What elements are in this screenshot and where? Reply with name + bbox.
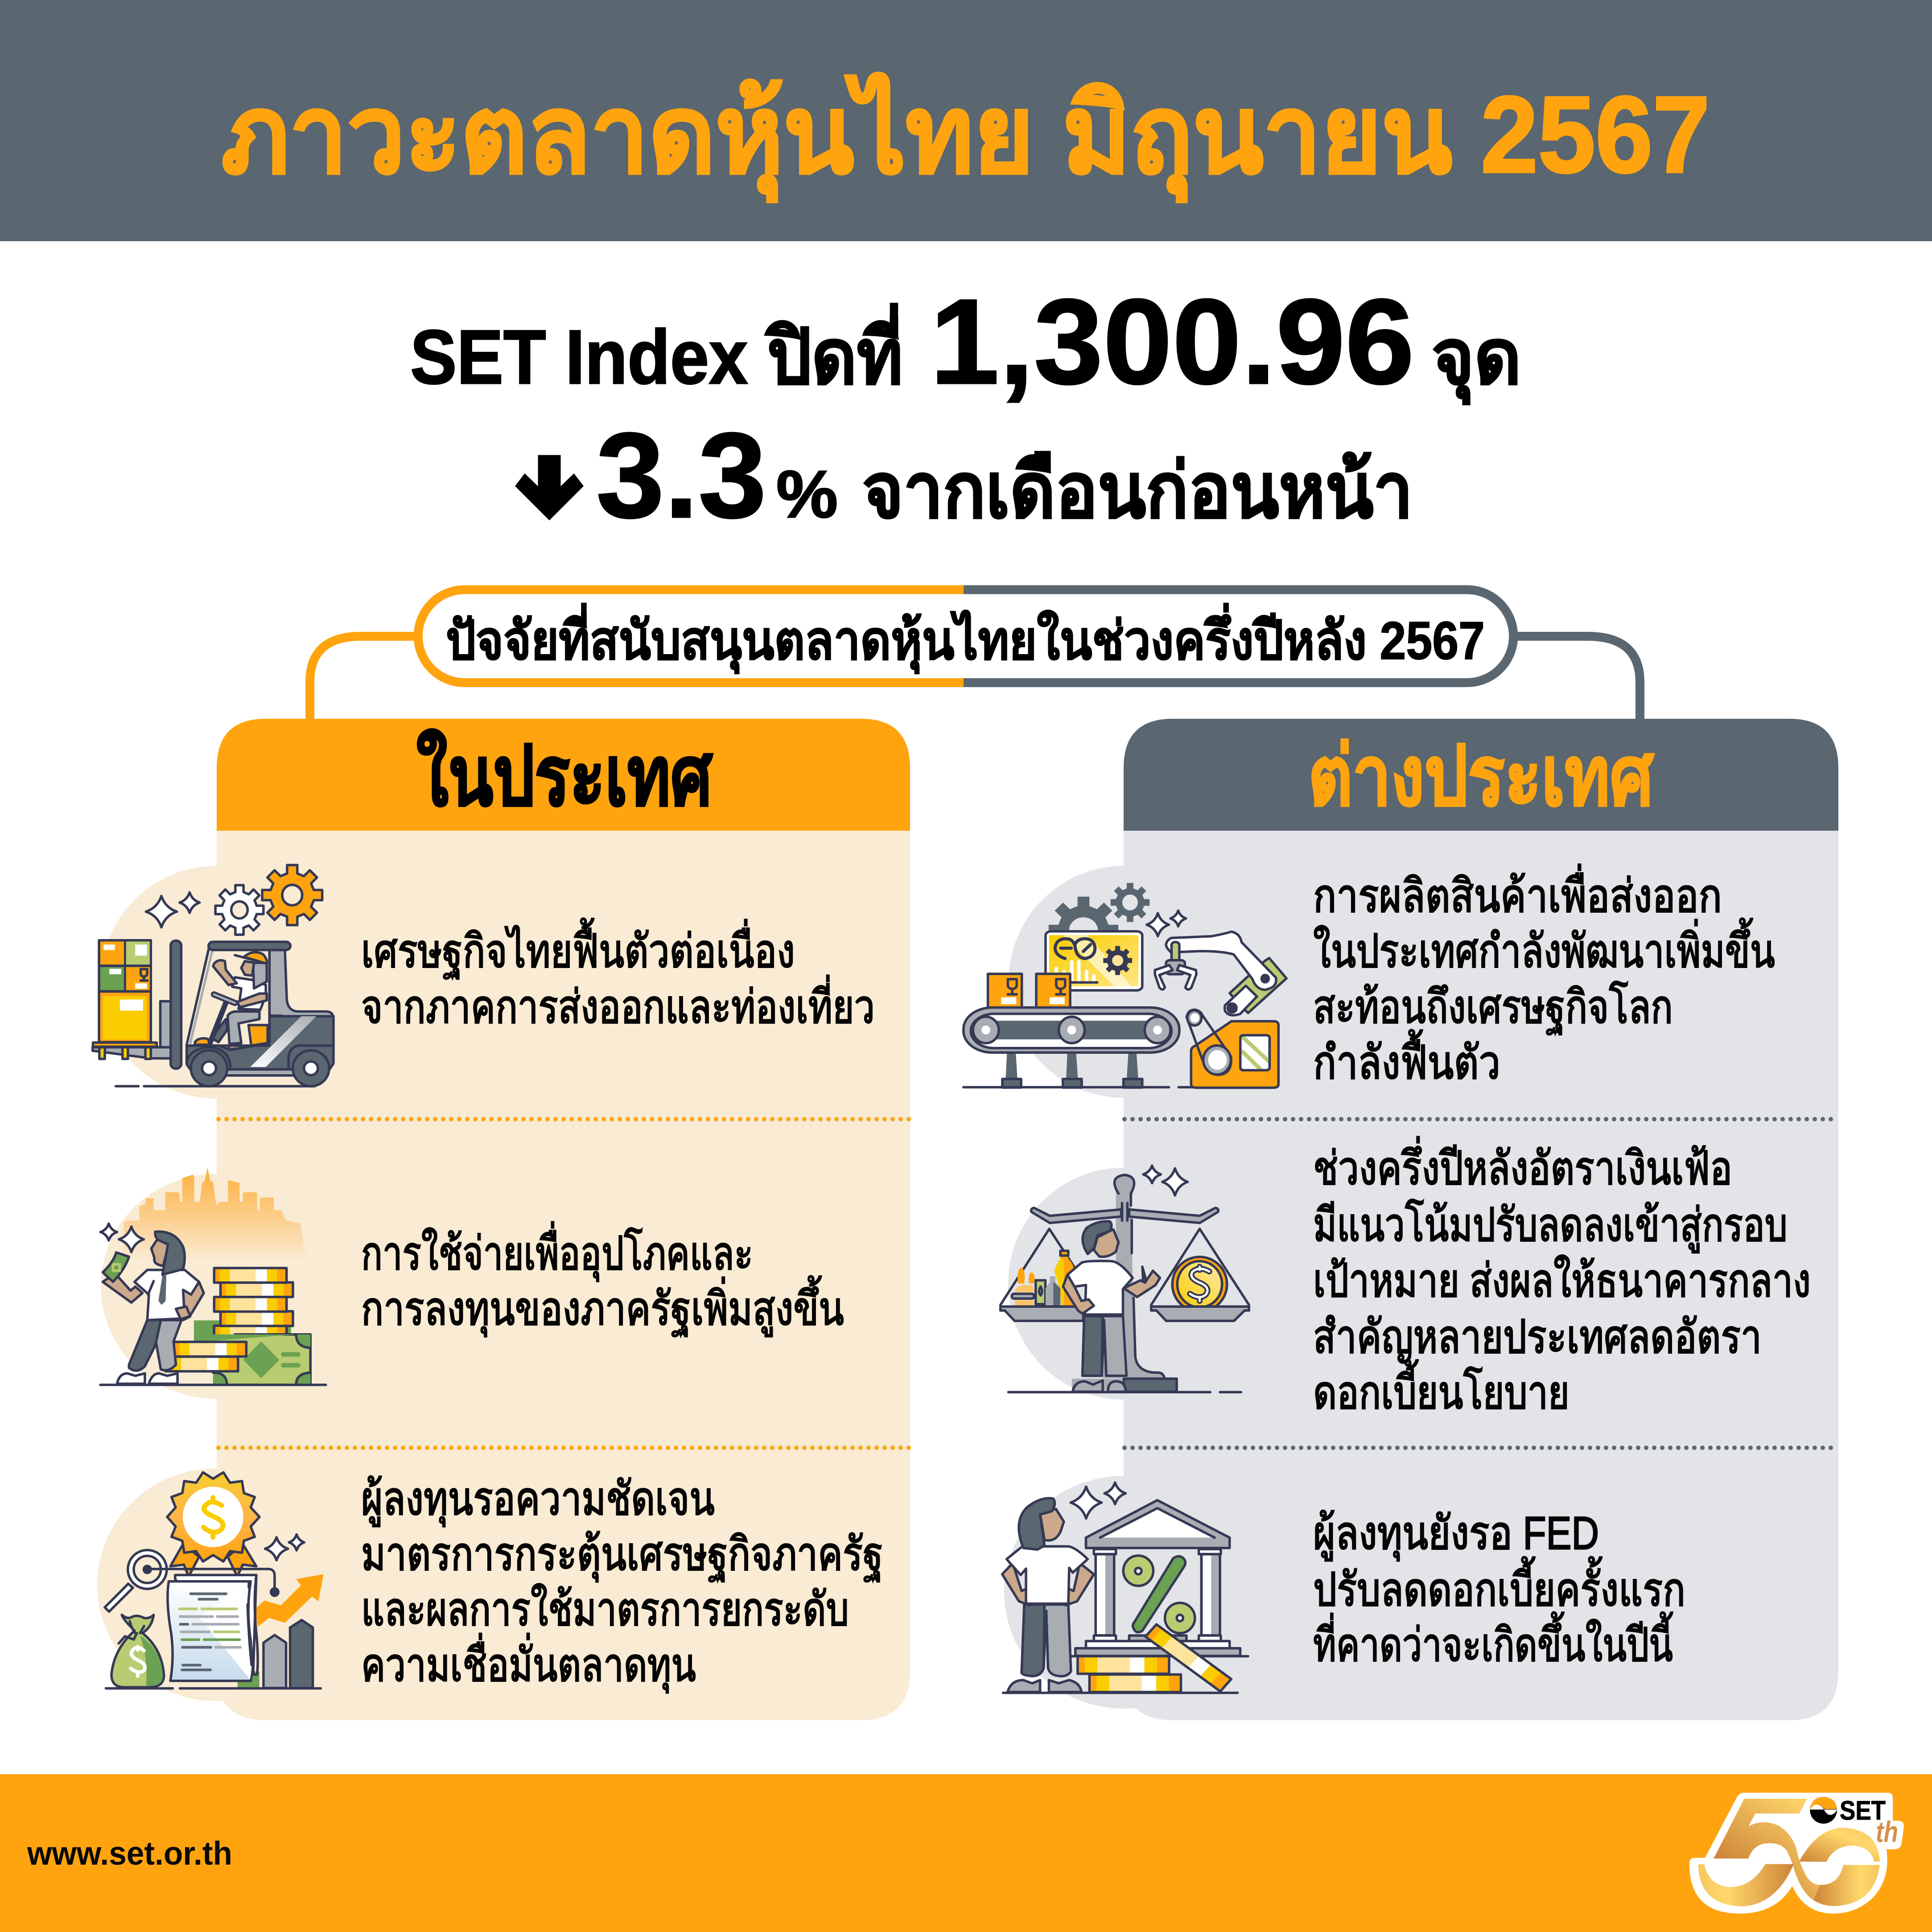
text: domestic 1 bbox=[361, 918, 875, 1033]
connector right bbox=[1512, 636, 1640, 725]
text: domestic 3: ความเชื่อมั่นตลาดทุน bbox=[361, 1633, 696, 1693]
icon: forklift bbox=[93, 865, 334, 1086]
change from previous month: จากเดือนก่อนหน้า bbox=[862, 448, 1413, 534]
text: domestic 2: การใช้จ่ายเพื่ออุปโภคและ bbox=[361, 1222, 753, 1282]
text: overseas 3 bbox=[1313, 1508, 1685, 1671]
text: overseas 3: ที่คาดว่าจะเกิดขึ้นในปีนี้ bbox=[1313, 1612, 1673, 1671]
text: domestic 3: มาตรการกระตุ้นเศรษฐกิจภาครัฐ bbox=[361, 1528, 883, 1582]
header band bbox=[0, 0, 1932, 241]
panel: domestic bbox=[97, 719, 910, 1720]
footer band bbox=[0, 1774, 1932, 1932]
website url: www.set.or.th bbox=[27, 1835, 232, 1872]
text: overseas 2 bbox=[1313, 1137, 1811, 1419]
text: overseas 1: กำลังฟื้นตัว bbox=[1313, 1030, 1500, 1089]
logo: SET 50th: SET bbox=[1840, 1796, 1886, 1825]
icon: central bank with percent and coins bbox=[1002, 1483, 1248, 1693]
text: domestic 3: ผู้ลงทุนรอความชัดเจน bbox=[361, 1473, 715, 1527]
icon: policy document, badge and growth bbox=[105, 1472, 324, 1689]
text: overseas 3: ผู้ลงทุนยังรอ FED bbox=[1313, 1508, 1599, 1561]
text: overseas 2: มีแนวโน้มปรับลดลงเข้าสู่กรอบ bbox=[1313, 1199, 1788, 1253]
connector left bbox=[310, 636, 421, 725]
panel: overseas bbox=[1004, 719, 1838, 1720]
text: overseas 1: ในประเทศกำลังพัฒนาเพิ่มขึ้น bbox=[1313, 918, 1775, 977]
change from previous month bbox=[516, 408, 1413, 543]
change from previous month: % bbox=[776, 457, 838, 531]
text: overseas 3: ปรับลดดอกเบี้ยครั้งแรก bbox=[1313, 1557, 1685, 1616]
text: domestic 3: และผลการใช้มาตรการยกระดับ bbox=[361, 1584, 849, 1635]
title: ภาวะตลาดหุ้นไทย มิถุนายน 2567 bbox=[222, 72, 1710, 202]
icon: spending, city, coins and cash bbox=[100, 1167, 326, 1385]
SET Index headline: จุด bbox=[1432, 314, 1521, 405]
change from previous month: 3.3 bbox=[596, 408, 766, 543]
text: domestic 2 bbox=[361, 1222, 844, 1337]
text: overseas 1: สะท้อนถึงเศรษฐกิจโลก bbox=[1313, 981, 1673, 1035]
SET Index headline bbox=[410, 274, 1521, 409]
logo: SET 50th bbox=[1689, 1793, 1904, 1914]
icon: scale with goods and coin bbox=[1001, 1166, 1249, 1392]
factors pill bbox=[418, 589, 1513, 683]
SET Index headline: 1,300.96 bbox=[930, 274, 1414, 409]
factors pill: ปัจจัยที่สนับสนุนตลาดหุ้นไทยในช่วงครึ่งปีหลัง 2567 bbox=[446, 603, 1485, 674]
panel: domestic: ในประเทศ bbox=[416, 729, 713, 823]
text: overseas 2: ช่วงครึ่งปีหลังอัตราเงินเฟ้อ bbox=[1313, 1137, 1732, 1195]
text: domestic 3 bbox=[361, 1473, 883, 1693]
panel: overseas: ต่างประเทศ bbox=[1308, 730, 1654, 823]
text: overseas 2: สำคัญหลายประเทศลดอัตรา bbox=[1313, 1311, 1762, 1364]
text: overseas 1 bbox=[1313, 864, 1775, 1089]
text: overseas 2: ดอกเบี้ยนโยบาย bbox=[1313, 1359, 1569, 1419]
text: domestic 1: จากภาคการส่งออกและท่องเที่ยว bbox=[361, 975, 875, 1033]
text: overseas 2: เป้าหมาย ส่งผลให้ธนาคารกลาง bbox=[1313, 1255, 1811, 1307]
text: domestic 2: การลงทุนของภาครัฐเพิ่มสูงขึ้น bbox=[361, 1276, 844, 1337]
SET Index headline: SET Index ปิดที่ bbox=[410, 303, 903, 400]
icon: factory conveyor and robot arm bbox=[964, 883, 1286, 1088]
text: domestic 1: เศรษฐกิจไทยฟื้นตัวต่อเนื่อง bbox=[361, 918, 795, 980]
logo: SET 50th: th bbox=[1876, 1815, 1898, 1848]
text: overseas 1: การผลิตสินค้าเพื่อส่งออก bbox=[1313, 864, 1722, 922]
